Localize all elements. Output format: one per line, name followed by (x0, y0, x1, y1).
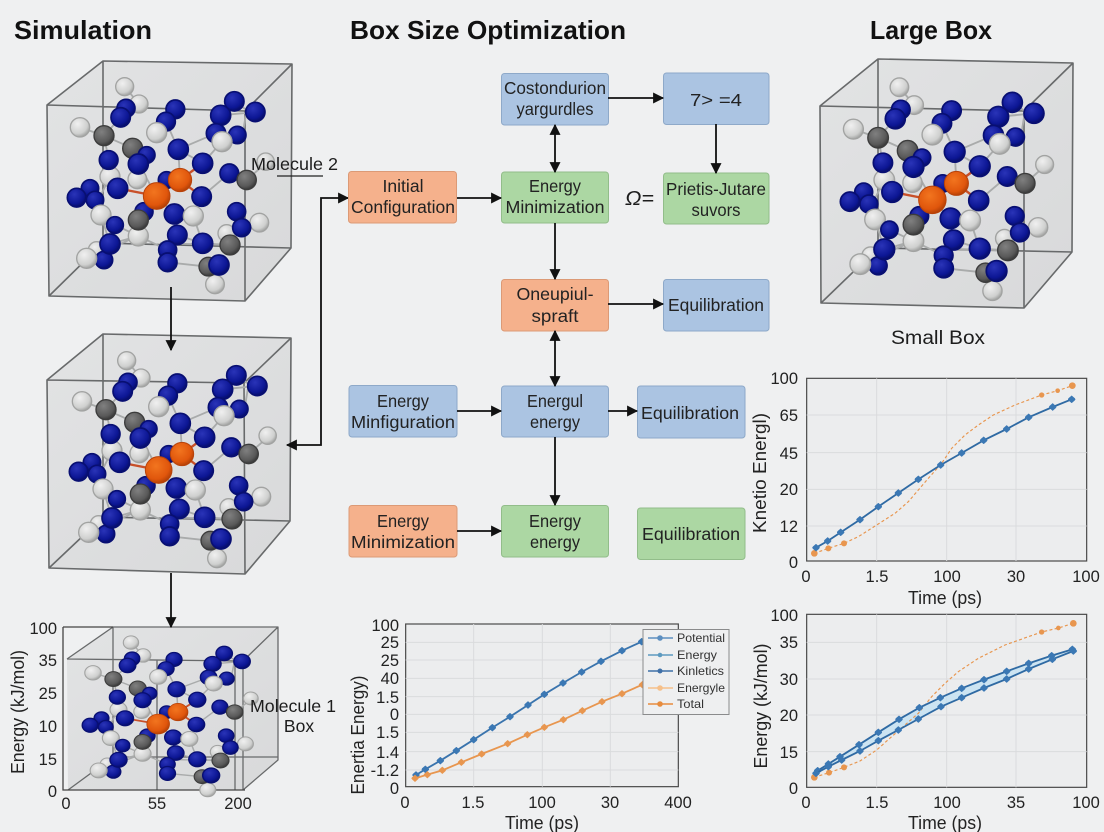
chart: energy kJ/mol: Energy (kJ/mol) (751, 644, 771, 768)
chart: enertia energy: 40 (381, 670, 399, 688)
box: Equilibration middle (638, 386, 745, 438)
chart: enertia energy: -1.2 (371, 762, 399, 780)
molecule box with energy axes: 200 (224, 795, 252, 813)
chart: enertia energy (348, 617, 729, 832)
chart: kinetic energy: 0 (801, 568, 811, 586)
molecule box with energy axes: 25 (39, 685, 57, 703)
molecule box with energy axes: 15 (39, 751, 57, 769)
box: Oneupiul-spraft: spraft (532, 306, 579, 326)
box: Prietis-Jutare suvors (664, 173, 769, 224)
title: Simulation: Simulation (14, 15, 152, 45)
chart: kinetic energy: 0 (789, 554, 798, 572)
chart: energy kJ/mol: 35 (1007, 794, 1025, 812)
chart: energy kJ/mol: 1.5 (866, 794, 888, 812)
molecule box with energy axes: Energy (kJ/mol) (8, 650, 28, 774)
chart: enertia energy: 0 (390, 706, 399, 724)
box: Energy Minimization: Energy (529, 176, 581, 196)
box: Equilibration green (638, 508, 745, 560)
chart: kinetic energy: 100 (933, 568, 961, 586)
box: Energy Minimization (502, 172, 608, 223)
box: Equilibration upper: Equilibration (668, 295, 764, 315)
box: Energy energy: energy (530, 532, 580, 552)
box: Initial Configuration (348, 172, 456, 223)
chart: kinetic energy: 1.5 (866, 568, 888, 586)
box: Energy energy: Energy (529, 511, 581, 531)
molecule box with energy axes: 0 (61, 795, 71, 813)
legend: Kinletics (677, 664, 724, 678)
symbol: omega equals: Ω= (625, 188, 654, 210)
arrow: initial configuration connector (287, 198, 348, 445)
box: Initial Configuration: Configuration (351, 197, 455, 217)
label: Molecule 2: Molecule 2 (251, 154, 338, 174)
chart: kinetic energy: 12 (780, 518, 798, 536)
label: Small Box: Small Box (891, 328, 986, 349)
box: Equilibration green: Equilibration (642, 524, 740, 544)
box: 7 > = 4 (664, 73, 769, 124)
chart: energy kJ/mol: 15 (780, 744, 798, 762)
molecule box 1 (47, 61, 292, 301)
chart: enertia energy: 100 (371, 617, 399, 635)
box: Energy Minfiguration: Energy (377, 391, 429, 411)
legend (643, 630, 729, 714)
chart: energy kJ/mol: 100 (770, 607, 798, 625)
chart: energy kJ/mol: 0 (801, 794, 811, 812)
legend: Energyle (677, 681, 725, 695)
chart: enertia energy: 0 (390, 780, 399, 798)
box: Costondurion yargurdles: yargurdles (516, 99, 594, 119)
arrow: box 2 to box 3 (170, 573, 172, 627)
molecule box with energy axes: 35 (39, 652, 57, 670)
box: Prietis-Jutare suvors: Prietis-Jutare (666, 179, 766, 199)
molecule box with energy axes: 10 (39, 718, 57, 736)
arrow: box 1 to box 2 (170, 287, 172, 350)
molecule box: large box (820, 59, 1073, 308)
box: Equilibration upper (664, 280, 769, 331)
legend: Potential (677, 631, 725, 645)
box: Energy Minfiguration: Minfiguration (351, 412, 455, 432)
box: Energy Minimization orange: Minimization (351, 532, 455, 552)
chart: enertia energy: 0 (400, 794, 410, 812)
chart: energy kJ/mol: 100 (933, 794, 961, 812)
box: Energy Minfiguration (349, 386, 457, 437)
label: Molecule 1 Box (250, 696, 336, 736)
flowchart (348, 73, 769, 560)
box: Energy Minimization orange: Energy (377, 511, 429, 531)
chart: enertia energy: 1.5 (376, 689, 399, 707)
label: Molecule 1 Box: Molecule 1 (250, 696, 336, 716)
molecule box with energy axes: 100 (29, 620, 57, 638)
box: Energul energy: energy (530, 412, 580, 432)
box: Costondurion yargurdles: Costondurion (504, 78, 606, 98)
box: Oneupiul-spraft (502, 280, 608, 331)
chart: enertia energy: 1.5 (376, 724, 399, 742)
box: Equilibration middle: Equilibration (641, 403, 739, 423)
molecule box 2 (47, 334, 291, 574)
molecule box with energy axes: 55 (148, 795, 166, 813)
chart: kinetic energy: Knetio Energl) (750, 413, 770, 533)
chart: energy kJ/mol: 35 (780, 634, 798, 652)
box: Initial Configuration: Initial (382, 176, 424, 196)
label: Molecule 1 Box: Box (284, 716, 314, 736)
box: 7 > = 4: 7> =4 (690, 90, 742, 110)
chart: kinetic energy: Time (ps) (908, 588, 982, 608)
chart: enertia energy: 30 (601, 794, 619, 812)
title: Large Box: Large Box (870, 15, 993, 45)
chart: kinetic energy: 30 (1007, 568, 1025, 586)
chart: enertia energy: 400 (664, 794, 692, 812)
chart: enertia energy: 25 (381, 652, 399, 670)
chart: energy kJ/mol: 20 (780, 707, 798, 725)
chart: kinetic energy: 20 (780, 481, 798, 499)
box: Prietis-Jutare suvors: suvors (692, 200, 741, 220)
chart: kinetic energy (750, 370, 1100, 608)
chart: kinetic energy: 45 (780, 445, 798, 463)
chart: kinetic energy: 65 (780, 407, 798, 425)
molecule box with energy axes: 0 (48, 783, 57, 801)
chart: enertia energy: 1.4 (376, 744, 399, 762)
chart: energy kJ/mol (751, 607, 1100, 832)
box: Costondurion yargurdles (502, 74, 608, 125)
box: Energy Minimization orange (349, 506, 457, 557)
flow arrows (457, 98, 716, 531)
box: Energul energy: Energul (527, 391, 583, 411)
chart: kinetic energy: 100 (1072, 568, 1100, 586)
chart: energy kJ/mol: 30 (780, 671, 798, 689)
legend: Energy (677, 648, 717, 662)
chart: enertia energy: Enertia Energy) (348, 676, 368, 794)
box: Oneupiul-spraft: Oneupiul- (516, 284, 594, 304)
title: Box Size Optimization: Box Size Optimization (350, 15, 626, 45)
box: Energy Minimization: Minimization (506, 197, 604, 217)
chart: enertia energy: 100 (528, 794, 556, 812)
chart: energy kJ/mol: 100 (1072, 794, 1100, 812)
box: Energul energy (502, 386, 608, 437)
chart: energy kJ/mol: 0 (789, 780, 798, 798)
chart: enertia energy: 1.5 (462, 794, 484, 812)
legend: Total (677, 697, 704, 711)
chart: enertia energy: 25 (381, 634, 399, 652)
box: Energy energy (502, 506, 608, 557)
chart: kinetic energy: 100 (770, 370, 798, 388)
molecule box with energy axes (8, 620, 278, 813)
